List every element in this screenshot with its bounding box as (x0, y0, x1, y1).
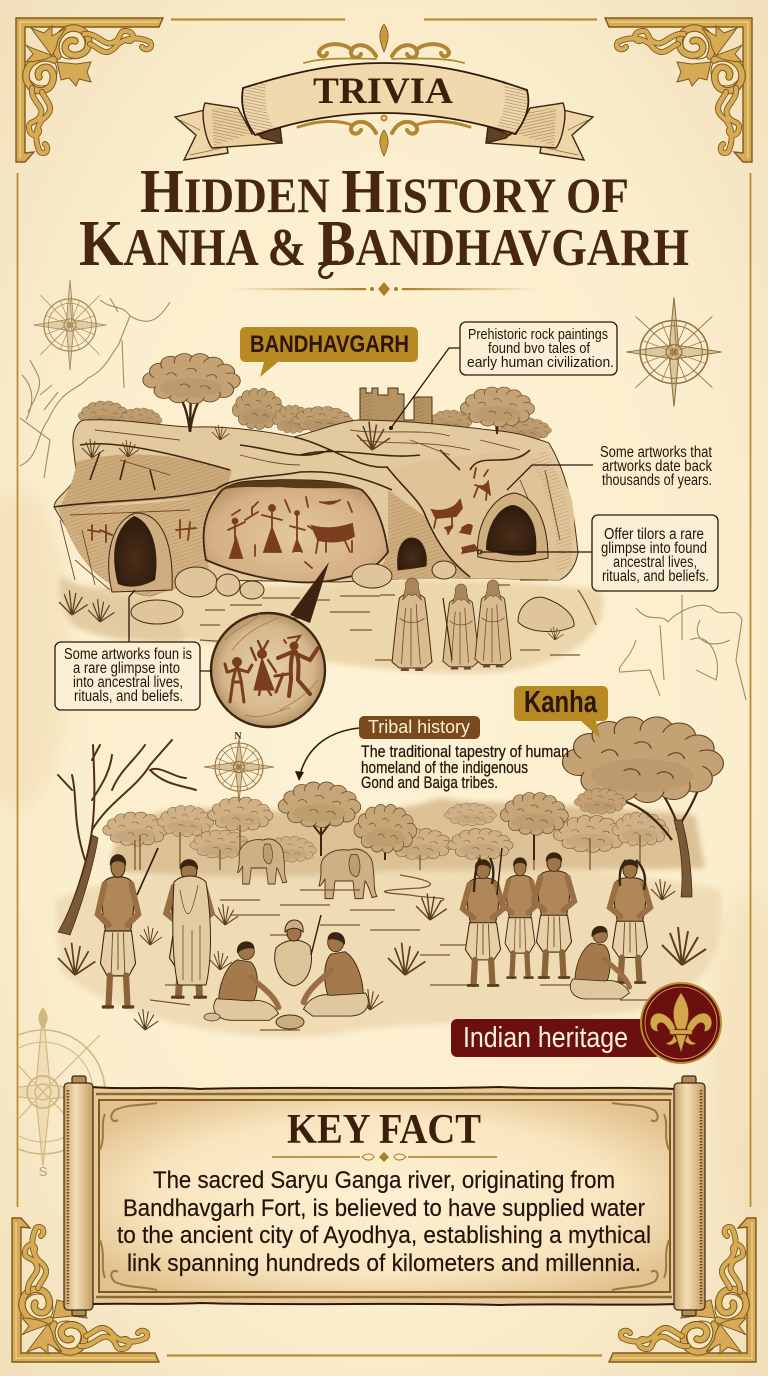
icon: compass upper right (627, 297, 721, 407)
rock cracks (54, 437, 530, 577)
ground wash (55, 866, 722, 1037)
callout: rare glimpse left: a rare glimpse into (73, 660, 180, 677)
callout: rare glimpse left: Some artworks foun is (64, 646, 192, 663)
title divider (231, 282, 537, 296)
ridge bushes and fort (78, 388, 551, 441)
standing man with spear left (98, 848, 158, 1007)
callout: artworks date back (507, 444, 713, 490)
text: tribal description: homeland of the indigenous (361, 758, 528, 777)
corner ornament: top left (16, 18, 163, 162)
background forest wash (112, 798, 705, 876)
rock mass (54, 420, 578, 596)
label: Bandhavgarh (240, 327, 418, 377)
trivia ribbon banner (175, 24, 593, 160)
badge: Indian heritage (451, 983, 721, 1063)
icon: compass upper left (33, 280, 107, 370)
crouching figure right (570, 926, 630, 999)
leader line (391, 348, 460, 428)
standing group right (463, 848, 650, 985)
callout: rock paintings: early human civilization. (467, 354, 614, 371)
callout: artworks date back: Some artworks that (600, 444, 713, 461)
rock art figures (225, 636, 318, 702)
grass tufts (59, 422, 563, 640)
icon: north compass (204, 731, 274, 802)
ornament above ribbon (304, 24, 464, 63)
large tree right (562, 717, 723, 897)
key fact body text: Bandhavgarh Fort, is believed to have supplied water (123, 1195, 645, 1222)
callout: rock paintings (389, 322, 617, 430)
callout: rock paintings: found bvo tales of (488, 340, 591, 357)
ribbon right tail (486, 103, 593, 160)
key fact body text: to the ancient city of Ayodhya, establishing a mythical (117, 1222, 651, 1249)
label: Tribal history with arrow (295, 716, 480, 781)
title line 1: HIDDEN HISTORY OF (140, 158, 629, 226)
callout: rare glimpse left: rituals, and beliefs. (74, 688, 183, 705)
text: tribal description (361, 742, 569, 792)
text: tribal description: Gond and Baiga tribes. (361, 773, 498, 792)
corner ornament: top right (605, 18, 752, 162)
ground marks (200, 580, 596, 660)
scroll corner flourishes (100, 1103, 669, 1290)
left roller (64, 1076, 93, 1316)
seal with fleur-de-lis (641, 983, 721, 1063)
rock art figures on panel (88, 497, 354, 568)
ornament below ribbon (298, 116, 470, 156)
tree on ridge right (460, 387, 534, 434)
boulders (131, 561, 574, 632)
cave: left (109, 513, 172, 592)
label: Kanha (514, 684, 608, 738)
callout: rare glimpse right: ancestral lives, (613, 554, 697, 571)
rock art on right wall (432, 468, 490, 553)
label: Tribal history with arrow: Tribal history (368, 717, 470, 737)
trivia label: TRIVIA (313, 71, 453, 112)
swash of capital B (320, 262, 338, 278)
callout: artworks date back: thousands of years. (602, 472, 712, 489)
callout: rare glimpse right: glimpse into found (601, 540, 707, 557)
key fact heading: KEY FACT (287, 1107, 481, 1153)
magnifier pointer (290, 562, 329, 623)
tree on ridge left (143, 354, 240, 432)
key fact body text (117, 1167, 651, 1277)
foreground mid trees (278, 782, 568, 860)
corner ornament: bottom left (12, 1218, 159, 1362)
icon: compass lower left (18, 1007, 106, 1166)
people walking (392, 578, 511, 671)
panel: key fact scroll (64, 1076, 705, 1316)
badge: Indian heritage: Indian heritage (463, 1022, 628, 1054)
ground wash (60, 580, 603, 673)
cave: middle (398, 538, 426, 570)
background trees (103, 797, 669, 862)
painted rock panel (204, 480, 388, 582)
grass tufts (58, 879, 706, 1030)
illustration: Kanha tribal landscape (55, 717, 723, 1037)
rock left ledge shading (58, 454, 232, 510)
label: Bandhavgarh: BANDHAVGARH (250, 331, 409, 358)
callout: rare glimpse right: Offer tilors a rare (604, 526, 704, 543)
ribbon left tail (175, 103, 282, 160)
callout: rare glimpse left (55, 590, 212, 710)
callout: rare glimpse right (478, 515, 718, 591)
callout: rare glimpse right: rituals, and beliefs. (602, 568, 709, 585)
key fact divider (272, 1152, 497, 1162)
decorative map: upper left (20, 298, 170, 478)
icon: north compass: N (234, 731, 242, 742)
standing woman left (166, 859, 212, 997)
compass lower left labels: S (39, 1164, 48, 1179)
rock lower-left slope (60, 575, 185, 642)
callout: rock paintings: Prehistoric rock paintings (468, 326, 608, 343)
label: Kanha: Kanha (524, 684, 598, 719)
key fact body text: The sacred Saryu Ganga river, originating from (153, 1167, 615, 1194)
bare tree left (58, 740, 196, 930)
key fact body text: link spanning hundreds of kilometers and millennia. (127, 1250, 641, 1277)
scroll parchment (92, 1087, 676, 1305)
text: tribal description: The traditional tapestry of human (361, 742, 569, 761)
corner ornament: bottom right (609, 1218, 756, 1362)
callout: artworks date back: artworks date back (602, 458, 712, 475)
cave: right (477, 493, 548, 562)
seated group (204, 915, 368, 1029)
stream and ground marks (150, 875, 690, 1030)
ribbon main band (242, 63, 528, 135)
magnifier circle with rock art (211, 562, 329, 727)
main title (79, 158, 689, 280)
elephants (238, 839, 377, 899)
illustration: Bandhavgarh rock shelter (54, 354, 603, 673)
right roller (674, 1076, 705, 1316)
decorative map: lower right (619, 595, 746, 700)
title line 2: KANHA & BANDHAVGARH (79, 207, 689, 280)
callout: rare glimpse left: into ancestral lives, (73, 674, 183, 691)
